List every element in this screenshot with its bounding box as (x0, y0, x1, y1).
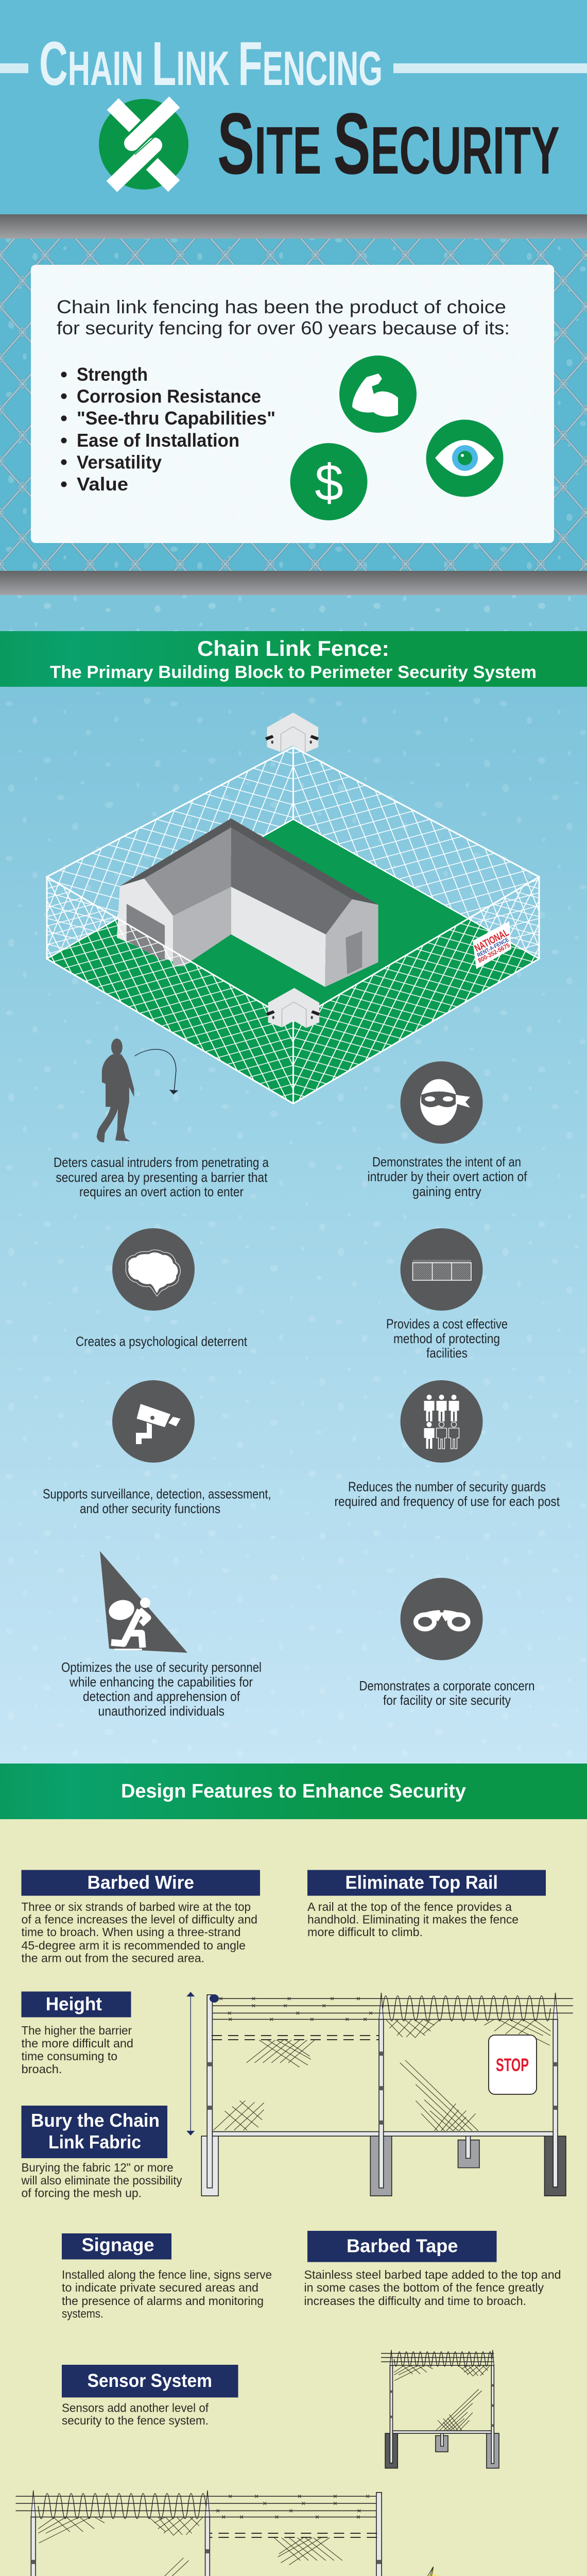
feature: bury the chain link fabric: Burying the fabric 12" or more (22, 2161, 173, 2174)
text: optimizes security personnel (61, 1659, 262, 1719)
benefits list: Corrosion Resistance (77, 385, 261, 407)
feature: barbed wire: of a fence increases the level of difficulty and (22, 1912, 257, 1926)
feature: signage: systems. (62, 2307, 103, 2320)
text: corporate concern: for facility or site security (383, 1692, 511, 1708)
feature: eliminate top rail: Eliminate Top Rail (345, 1872, 498, 1893)
feature: eliminate top rail (307, 1870, 546, 1939)
band below fence (0, 595, 587, 631)
panel: chain link fence background (0, 214, 587, 595)
icon: fence (401, 1228, 483, 1311)
feature: sensor system (62, 2365, 238, 2427)
benefits list: Ease of Installation (77, 430, 239, 451)
heading: primary building block: Chain Link Fence: (197, 636, 389, 660)
feature: height: broach. (22, 2062, 62, 2076)
intro text: for security fencing for over 60 years because of its: (57, 317, 510, 338)
title: Chain Link Fencing: CHAIN LINK FENCING (39, 28, 383, 98)
text: demonstrates intent (368, 1154, 527, 1199)
feature: height: time consuming to (22, 2049, 117, 2063)
feature: barbed tape: increases the difficulty and time to broach. (304, 2294, 526, 2308)
icon: burglar in spotlight (100, 1551, 187, 1653)
section 2 background (0, 687, 587, 1764)
feature: bury the chain link fabric: Link Fabric (48, 2131, 141, 2153)
intro text (57, 296, 510, 338)
feature: bury the chain link fabric: will also eliminate the possibility (21, 2174, 182, 2187)
text: corporate concern (359, 1678, 534, 1708)
feature: bury the chain link fabric (21, 2106, 182, 2200)
feature: sensor system: Sensor System (88, 2370, 212, 2391)
feature: signage: Signage (81, 2234, 154, 2255)
text: optimizes security personnel: while enhancing the capabilities for (69, 1674, 253, 1690)
icon: binoculars (401, 1578, 483, 1660)
text: reduces security guards: Reduces the number of security guards (348, 1479, 546, 1494)
perimeter fence illustration (47, 713, 539, 1104)
benefits list (61, 364, 275, 495)
text: supports surveillance: and other security functions (80, 1501, 220, 1516)
feature: signage: Installed along the fence line, signs serve (62, 2268, 272, 2281)
feature: barbed tape (304, 2231, 561, 2308)
sign: stop: STOP (496, 2055, 529, 2075)
text: cost effective: method of protecting (393, 1331, 500, 1346)
text: cost effective: Provides a cost effective (386, 1316, 508, 1332)
icon: dollar (290, 443, 368, 520)
intro text: Chain link fencing has been the product of choice (57, 296, 506, 317)
heading: design features: Design Features to Enhance Security (121, 1781, 466, 1802)
sensor dot (210, 1994, 219, 2003)
feature: barbed wire: 45-degree arm it is recommended to angle (22, 1939, 246, 1952)
text: corporate concern: Demonstrates a corporate concern (359, 1678, 534, 1693)
feature: eliminate top rail: handhold. Eliminating it makes the fence (307, 1912, 519, 1926)
heading: primary building block (0, 631, 587, 687)
text: deters casual intruders: secured area by presenting a barrier that (56, 1170, 268, 1185)
feature: sensor system: Sensors add another level of (62, 2401, 209, 2415)
icon: muscle (339, 355, 417, 433)
text: reduces security guards (335, 1479, 560, 1509)
text: optimizes security personnel: Optimizes the use of security personnel (61, 1659, 262, 1675)
sign: National Rent-A-Fence (473, 921, 511, 969)
corner guard post: back (265, 713, 319, 753)
corner guard post: front (266, 988, 320, 1028)
text: optimizes security personnel: detection and apprehension of (83, 1689, 240, 1704)
text: cost effective: facilities (426, 1345, 468, 1361)
text: deters casual intruders: requires an overt action to enter (79, 1184, 244, 1199)
icon: brain (112, 1228, 195, 1311)
sign: National Rent-A-Fence: RENT-A-FENCE (476, 937, 510, 959)
icon: chain link logo (99, 99, 188, 190)
panel: intro card (31, 265, 554, 543)
feature: barbed wire: Three or six strands of barbed wire at the top (22, 1900, 251, 1913)
feature: height: The higher the barrier (22, 2024, 132, 2037)
feature: barbed wire (22, 1870, 260, 1965)
diagram: fence with barbed wire and tape (186, 1992, 573, 2196)
benefits list: "See-thru Capabilities" (77, 408, 275, 429)
feature: height: Height (46, 1993, 102, 2014)
sign: National Rent-A-Fence: 800-352-5675 (477, 941, 511, 964)
text: deters casual intruders: Deters casual intruders from penetrating a (54, 1155, 269, 1170)
feature: sensor system: security to the fence system. (62, 2414, 209, 2427)
feature: signage: to indicate private secured areas and (62, 2281, 258, 2294)
benefits list: Strength (77, 364, 148, 385)
icon: security guards (401, 1380, 483, 1463)
panel: design features background (0, 1819, 587, 2576)
feature: barbed tape: in some cases the bottom of the fence greatly (304, 2281, 544, 2294)
back fence walls (47, 747, 539, 959)
diagram: large fence with bottom rail (16, 2490, 387, 2576)
feature: eliminate top rail: A rail at the top of the fence provides a (307, 1900, 512, 1913)
diagram: small barbed tape fence (381, 2350, 499, 2468)
feature: barbed wire: time to broach. When using a three-strand (22, 1925, 241, 1939)
icon: person and arrow (97, 1039, 178, 1142)
feature: signage: the presence of alarms and monitoring (62, 2294, 264, 2308)
sign: National Rent-A-Fence: NATIONAL (473, 927, 511, 954)
text: psychological deterrent: Creates a psychological deterrent (76, 1334, 248, 1349)
building (117, 818, 378, 987)
feature: barbed wire: Barbed Wire (88, 1872, 194, 1893)
feature: height (22, 1992, 133, 2076)
feature: bury the chain link fabric: Bury the Chain (31, 2110, 160, 2131)
benefits list: Value (77, 473, 128, 495)
text: demonstrates intent: intruder by their overt action of (368, 1168, 527, 1184)
feature: barbed tape: Stainless steel barbed tape added to the top and (304, 2268, 561, 2281)
benefits list: Versatility (77, 451, 162, 473)
text: supports surveillance: Supports surveillance, detection, assessment, (43, 1486, 271, 1502)
text: demonstrates intent: gaining entry (412, 1184, 481, 1199)
icon: dollar: $ (315, 454, 343, 512)
text: deters casual intruders (54, 1155, 269, 1199)
fence frame (47, 747, 539, 1104)
text: demonstrates intent: Demonstrates the intent of an (372, 1154, 521, 1170)
feature: signage (62, 2233, 272, 2320)
text: reduces security guards: required and frequency of use for each post (335, 1494, 560, 1509)
arrow: fence height (186, 1992, 195, 2136)
feature: barbed tape: Barbed Tape (347, 2235, 458, 2257)
sign: stop (489, 2035, 537, 2094)
feature: bury the chain link fabric: of forcing the mesh up. (22, 2187, 142, 2200)
text: optimizes security personnel: unauthorized individuals (98, 1703, 225, 1719)
icon: light pole and beam (403, 2567, 471, 2576)
icon: masked intruder (401, 1061, 483, 1144)
front fence walls (47, 877, 539, 1104)
feature: eliminate top rail: more difficult to climb. (307, 1925, 423, 1939)
header background (0, 0, 587, 214)
heading: design features (0, 1764, 587, 1819)
icon: eye (426, 419, 504, 497)
feature: barbed wire: the arm out from the secured area. (22, 1952, 204, 1965)
feature: height: the more difficult and (22, 2037, 133, 2050)
text: supports surveillance (43, 1486, 271, 1516)
green ground (47, 819, 539, 1104)
icon: surveillance camera (112, 1380, 195, 1463)
text: cost effective (386, 1316, 508, 1361)
heading: primary building block: The Primary Building Block to Perimeter Security System (50, 663, 537, 682)
